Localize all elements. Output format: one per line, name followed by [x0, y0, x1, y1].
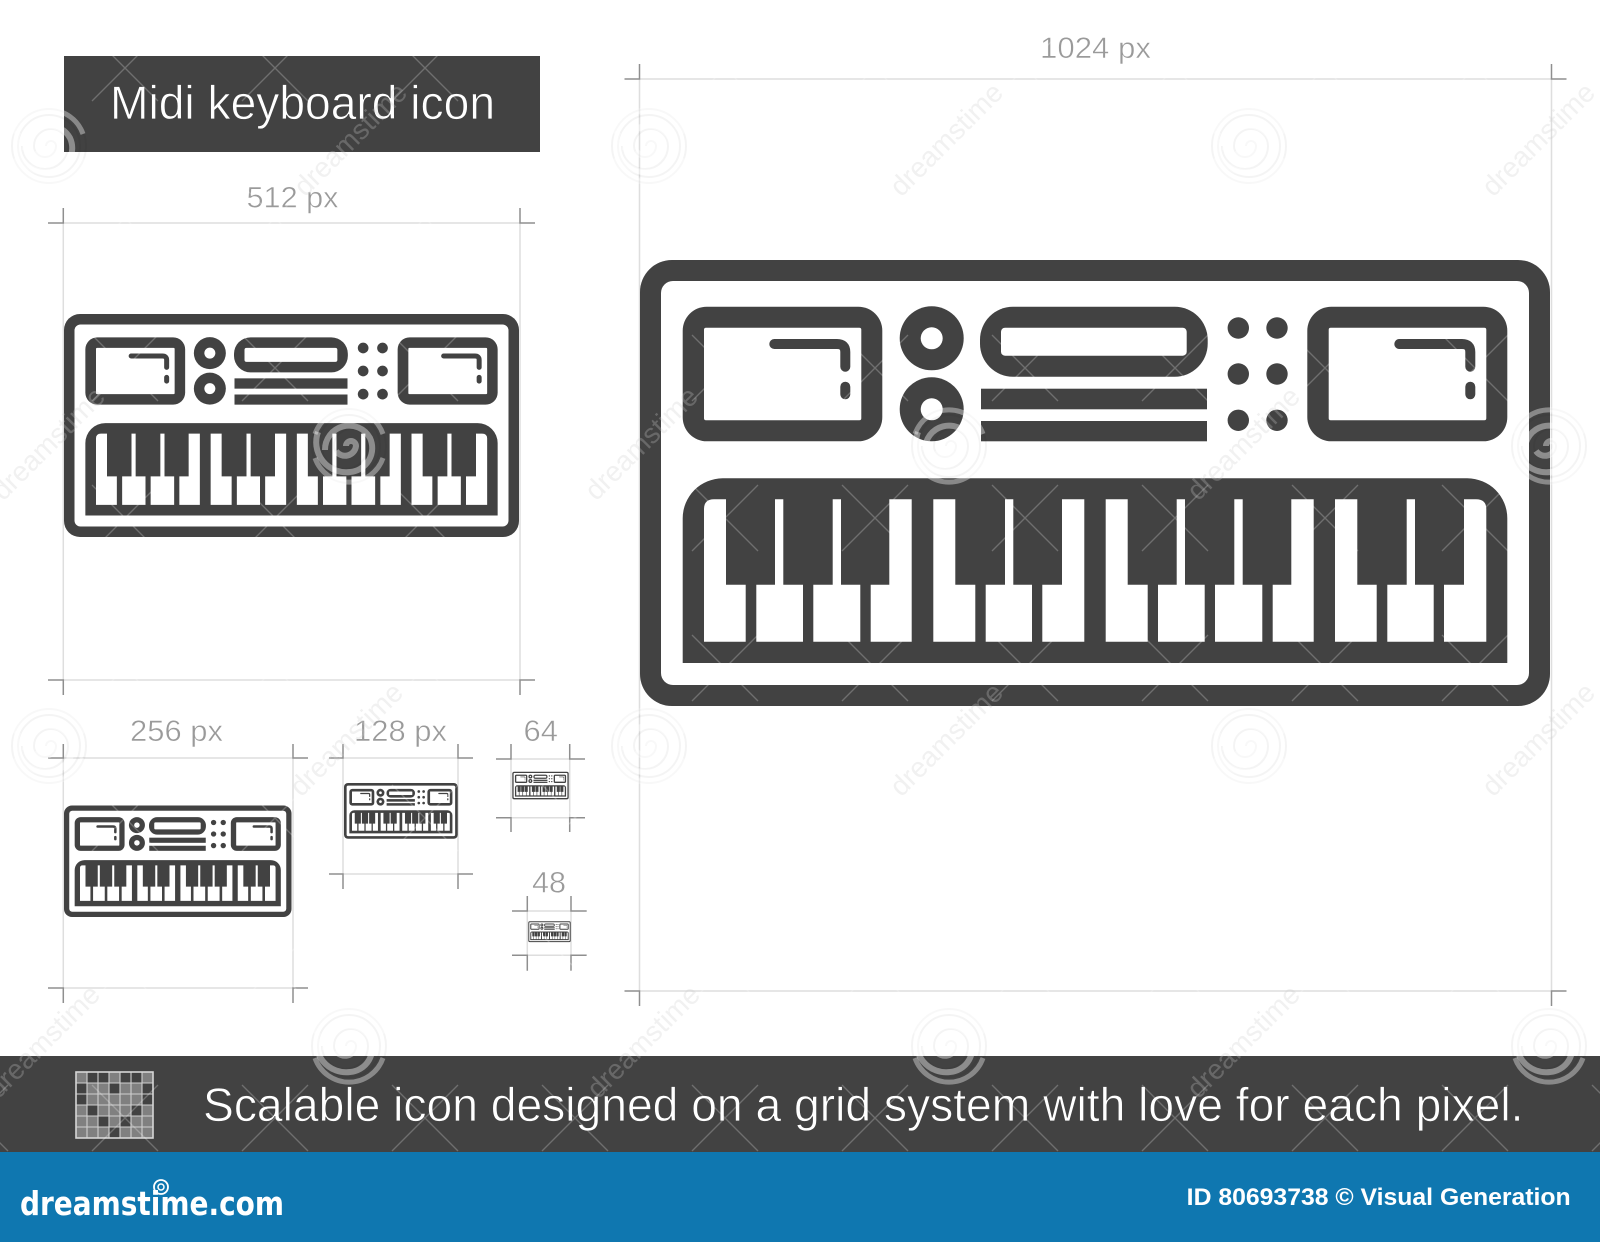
footer blue bar — [0, 1152, 1600, 1242]
watermark: diagonal text: dreamstime — [1476, 677, 1600, 802]
footer credit: ID 80693738 © Visual Generation — [1187, 1184, 1571, 1211]
label: 128 px: 128 px — [354, 715, 447, 748]
watermark: diagonal text: dreamstime — [284, 677, 409, 802]
label: 48: 48 — [532, 867, 566, 900]
guide frame: 256 px — [48, 744, 308, 1003]
guide frame: 128 px — [329, 744, 473, 889]
title banner — [64, 56, 540, 152]
watermark: diagonal text: dreamstime — [1181, 979, 1306, 1104]
icon: midi keyboard 512 px — [64, 314, 519, 537]
label: 1024 px: 1024 px — [1040, 32, 1151, 65]
watermark: spirals — [12, 109, 1586, 1083]
watermark: diagonal text: dreamstime — [581, 979, 706, 1104]
footer logo: dreamstime.com — [20, 1184, 284, 1223]
label: 256 px: 256 px — [130, 715, 223, 748]
band caption: Scalable icon designed on a grid system with love for each pixel. — [203, 1078, 1524, 1131]
guide frame: 1024 px — [624, 64, 1566, 1006]
title banner: Midi keyboard icon — [110, 76, 495, 129]
guide frame: 48 px — [512, 896, 587, 971]
icon: midi keyboard 256 px — [64, 806, 292, 917]
watermark: diagonal text: dreamstime — [579, 381, 704, 506]
watermark: diagonal text: dreamstime — [1476, 77, 1600, 202]
icon: midi keyboard 128 px — [344, 783, 458, 839]
icon: midi keyboard 64 px — [512, 772, 569, 799]
bottom dark band — [0, 1056, 1600, 1152]
icon: midi keyboard 1024 px — [640, 260, 1550, 706]
label: 512 px: 512 px — [246, 182, 338, 214]
watermark: diagonal text: dreamstime — [884, 677, 1009, 802]
guide frame: 64 px — [496, 744, 585, 832]
icon: midi keyboard 48 px — [528, 921, 571, 942]
watermark: diagonal text: dreamstime — [288, 77, 413, 202]
watermark: diagonal text: dreamstime — [884, 77, 1009, 202]
watermark: diagonal text: dreamstime — [1181, 381, 1306, 506]
label: 64: 64 — [524, 715, 558, 748]
icon: pixel grid — [76, 1072, 153, 1138]
guide frame: 512 px — [48, 208, 535, 695]
